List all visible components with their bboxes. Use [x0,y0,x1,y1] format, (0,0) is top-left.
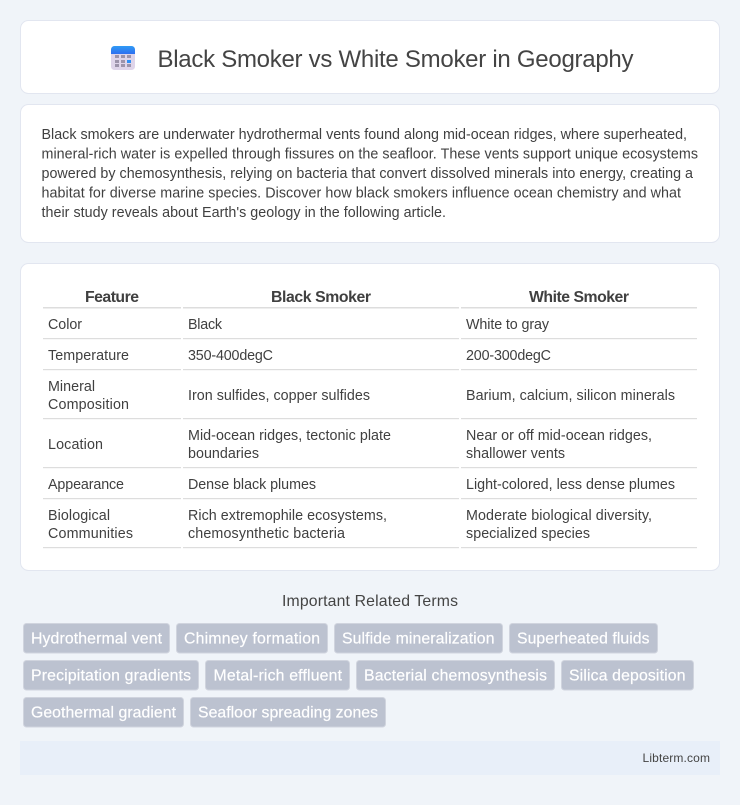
panel: related term tags: Chimney formation [184,630,320,648]
panel: related term tags: Hydrothermal vent [31,630,163,648]
panel: related term tags: Geothermal gradient [31,704,177,722]
row: biological communities: Communities [48,526,133,542]
row: mineral composition: Barium, calcium, silicon minerals [466,388,675,404]
row: biological communities: chemosynthetic bacteria [188,526,345,542]
row: location: Near or off mid-ocean ridges, [466,428,652,444]
row: temperature: 200-300degC [466,348,551,364]
footer: Libterm.com [642,751,710,765]
row: location: shallower vents [466,446,565,462]
footer [20,741,720,775]
panel: comparison table [20,264,720,570]
row: appearance: Appearance [48,477,124,493]
row: temperature: 350-400degC [188,348,273,364]
row: biological communities: Moderate biological diversity, [466,508,652,524]
panel: related term tags: Sulfide mineralization [342,630,494,648]
row: location: Location [48,437,103,453]
panel: related term tags: Silica deposition [569,668,686,684]
text block: introduction paragraph: Black smokers are underwater hydrothermal vents found along mid-ocean ridges, where superheated, [42,127,687,143]
row: appearance: Light-colored, less dense plumes [466,477,675,493]
text block: introduction paragraph: their study reveals about Earth's geology in the following article. [42,205,446,221]
panel: related term tags: Metal-rich effluent [214,668,343,684]
icon: calendar [111,46,135,70]
table header row: Feature [85,289,139,306]
row: biological communities: specialized species [466,526,590,542]
title: Black Smoker vs White Smoker in Geography [158,46,634,73]
row: mineral composition: Composition [48,397,129,413]
row: mineral composition: Iron sulfides, copper sulfides [188,388,370,404]
table header row: White Smoker [529,289,629,306]
table header row: Black Smoker [271,289,371,306]
row: biological communities: Biological [48,508,110,524]
row: temperature: Temperature [48,348,129,364]
row: temperature [48,348,551,364]
row: mineral composition: Mineral [48,379,95,395]
row: location [48,428,652,462]
panel: related term tags: Seafloor spreading zones [198,704,378,722]
row: color: White to gray [466,317,550,333]
panel: related term tags: Bacterial chemosynthesis [364,668,547,684]
row: mineral composition [48,379,675,413]
row: biological communities: Rich extremophile ecosystems, [188,508,387,524]
row: appearance: Dense black plumes [188,477,316,493]
panel: related term tags: Superheated fluids [517,630,650,648]
header panel [20,20,720,94]
row: color: Color [48,317,82,333]
panel: related term tags: Precipitation gradients [31,668,191,684]
panel: introduction [20,104,720,242]
row: color [48,317,550,333]
table header row [85,289,629,306]
text block: introduction paragraph: mineral-rich water is expelled through fissures on the seafloor. These vents support unique ecosystems [42,146,698,162]
text block: introduction paragraph [42,127,698,221]
panel: related term tags [24,624,694,727]
heading: important related terms: Important Related Terms [282,593,458,610]
row: color: Black [188,317,223,333]
text block: introduction paragraph: powered by chemosynthesis, relying on bacteria that convert dissolved minerals into energy, creating a [42,166,693,182]
text block: introduction paragraph: habitat for diverse marine species. Discover how black smokers influence ocean chemistry and what [42,186,681,202]
row: biological communities [48,508,652,542]
row: location: Mid-ocean ridges, tectonic plate [188,428,391,444]
row: location: boundaries [188,446,259,462]
row: appearance [48,477,675,493]
